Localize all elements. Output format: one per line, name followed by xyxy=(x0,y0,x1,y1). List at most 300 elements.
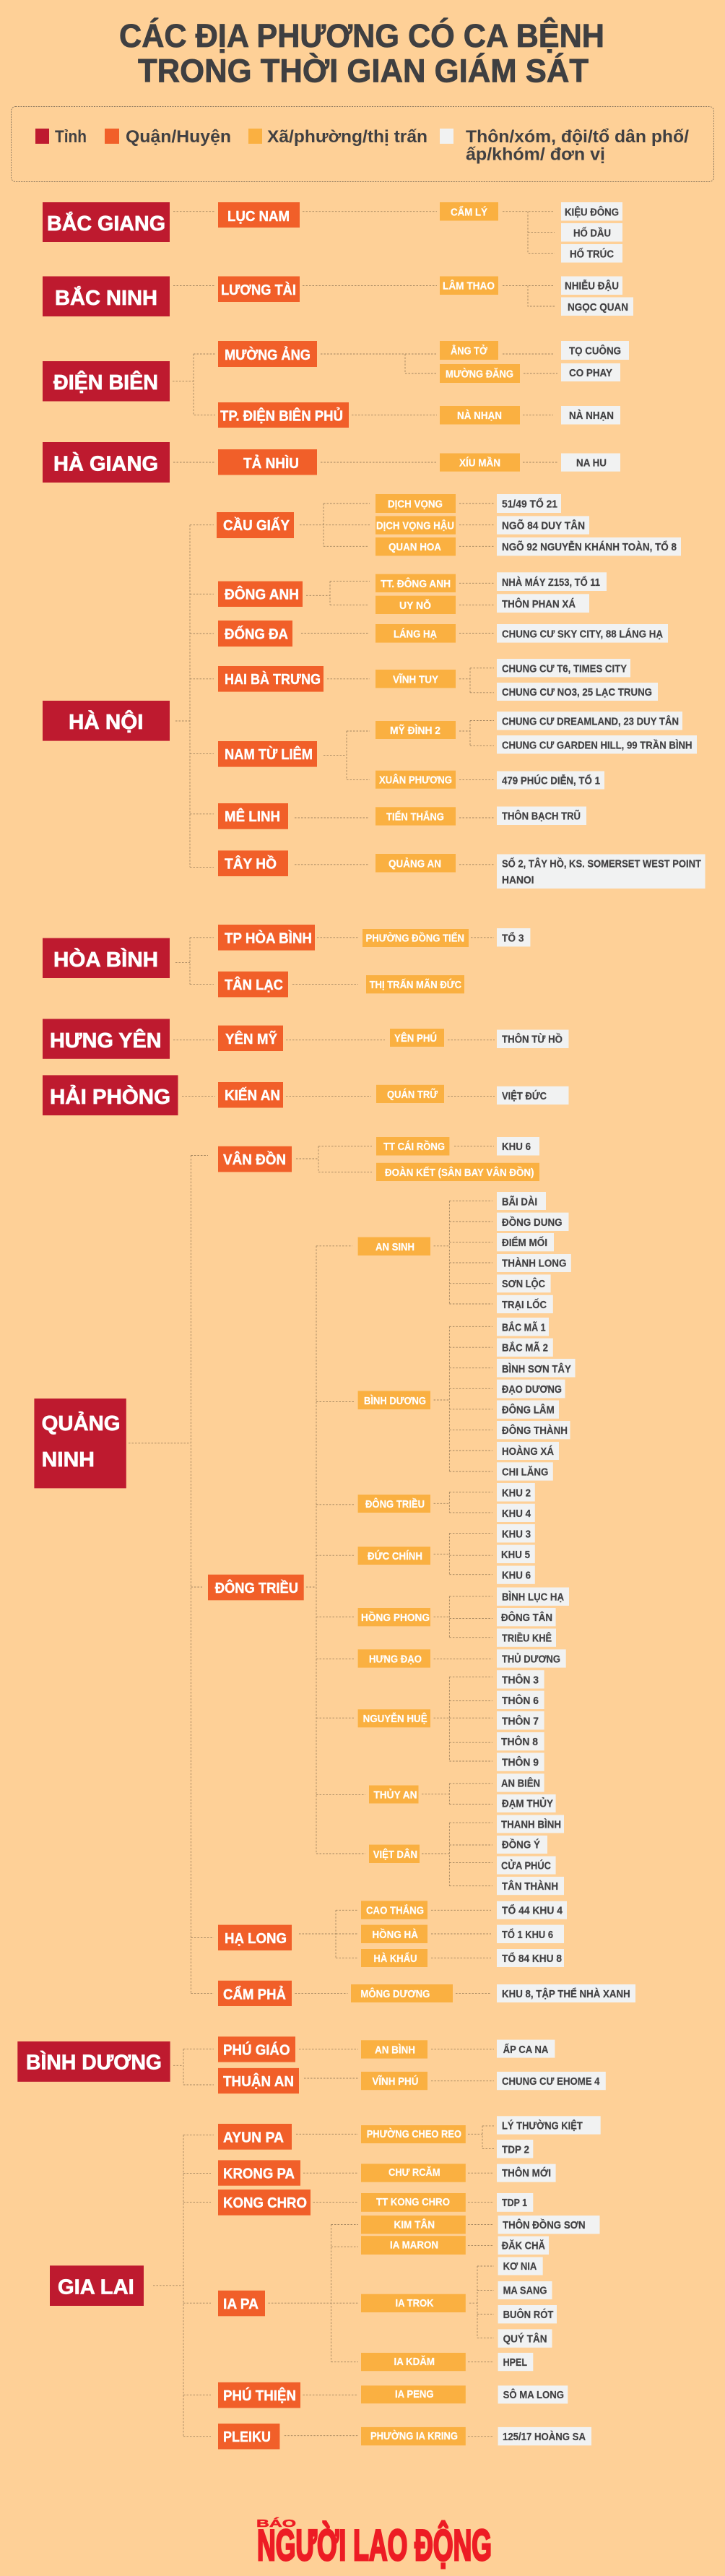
district: Krong Pa: KRONG PA xyxy=(223,2166,295,2182)
village: Đạo Dương: ĐẠO DƯƠNG xyxy=(502,1383,562,1396)
commune: Đức Chính xyxy=(358,1547,430,1565)
district: Pleiku: PLEIKU xyxy=(223,2429,271,2445)
village: Thôn 7 xyxy=(497,1711,544,1729)
district: Tân Lạc: TÂN LẠC xyxy=(225,976,283,993)
legend item: Tỉnh: Tỉnh xyxy=(55,127,87,147)
commune: Thủy An: THỦY AN xyxy=(373,1788,417,1801)
commune: TT Kong Chro xyxy=(361,2193,466,2212)
district: Hạ Long: HẠ LONG xyxy=(225,1931,287,1947)
district: Mường Ảng: MƯỜNG ẢNG xyxy=(225,346,311,363)
village: Tọ Cuông xyxy=(561,341,629,360)
commune: Xuân Phương: XUÂN PHƯƠNG xyxy=(379,773,452,786)
address: Nhà máy Z153 xyxy=(497,572,607,591)
commune: TT. Đông Anh xyxy=(375,574,456,592)
address: Tổ 1 Khu 6: TỔ 1 KHU 6 xyxy=(502,1928,553,1941)
village: TDP 2: TDP 2 xyxy=(502,2143,529,2156)
village: Na Hu xyxy=(561,454,620,472)
address: Thôn Phan Xá xyxy=(497,594,589,613)
commune: Ia Trok xyxy=(361,2294,466,2312)
commune: Kim Tân xyxy=(361,2216,466,2234)
village: Nà Nhạn: NÀ NHẠN xyxy=(569,410,614,422)
village: Ấp Ca Na: ẤP CA NA xyxy=(503,2044,549,2056)
province tree: Hưng Yên xyxy=(43,1019,569,1059)
commune: Vĩnh Tuy xyxy=(375,670,456,688)
logo: Báo Người Lao Động: BÁO xyxy=(256,2517,297,2530)
province tree: Hòa Bình xyxy=(43,925,530,997)
village: Hố Trúc: HỐ TRÚC xyxy=(570,247,614,260)
village: Thủ Dương: THỦ DƯƠNG xyxy=(502,1653,560,1666)
address: Somerset West Point xyxy=(497,854,705,889)
commune: Ẳng Tở: ẲNG TỞ xyxy=(451,344,487,357)
province: Hưng Yên xyxy=(43,1019,170,1059)
village: Thôn Đồng Sơn xyxy=(498,2216,599,2234)
commune: TT Cái Rồng: TT CÁI RỒNG xyxy=(383,1140,445,1153)
address: Ngõ 92 Nguyễn Khánh Toàn xyxy=(497,537,681,556)
district: Hai Bà Trưng xyxy=(218,666,324,692)
village: Đăk Chă: ĐĂK CHĂ xyxy=(502,2240,545,2252)
village: Ngọc Quan: NGỌC QUAN xyxy=(568,301,628,314)
district: Cẩm Phả: CẨM PHẢ xyxy=(223,1987,286,2002)
district: Nam Từ Liêm: NAM TỪ LIÊM xyxy=(225,745,313,763)
village: Ấp Ca Na xyxy=(497,2040,555,2058)
village: Thôn 9 xyxy=(497,1752,544,1771)
village: Sơn Lộc xyxy=(497,1274,551,1292)
commune: Đức Chính: ĐỨC CHÍNH xyxy=(368,1550,422,1563)
address: Ngõ 84 Duy Tân: NGÕ 84 DUY TÂN xyxy=(502,519,585,532)
address: Tổ 44 Khu 4 xyxy=(497,1901,567,1919)
village: Quý Tân: QUÝ TÂN xyxy=(503,2332,547,2345)
address: Thôn Phan Xá: THÔN PHAN XÁ xyxy=(502,597,576,610)
commune: Hà Khẩu xyxy=(361,1949,427,1967)
address: Somerset West Point: HANOI xyxy=(502,874,534,886)
village: Thôn 9: THÔN 9 xyxy=(502,1756,539,1769)
village: Khu 5: KHU 5 xyxy=(501,1549,530,1561)
village: Hpel xyxy=(498,2353,533,2371)
village: Bãi Dài xyxy=(497,1192,546,1210)
province: Bắc Giang: BẮC GIANG xyxy=(47,211,165,235)
address: Tổ 3 xyxy=(497,928,530,946)
commune: Phường Cheo Reo: PHƯỜNG CHEO REO xyxy=(367,2127,461,2140)
village: Chi Lăng xyxy=(497,1462,553,1481)
village: Sô Ma Long: SÔ MA LONG xyxy=(503,2388,564,2401)
district: Cầu Giấy: CẦU GIẤY xyxy=(223,517,290,534)
province tree: Bắc Ninh xyxy=(43,276,633,316)
district: TP. Điện Biên Phủ xyxy=(218,402,349,428)
commune: Uy Nỗ xyxy=(375,596,456,614)
commune: Bình Dương xyxy=(358,1391,430,1409)
village: Thôn Từ Hồ: THÔN TỪ HỒ xyxy=(502,1033,563,1046)
district: Thuận An xyxy=(218,2068,299,2093)
address: NO3 Lạc Trung xyxy=(497,683,658,701)
village: Khu 6 xyxy=(497,1566,535,1584)
address: Thôn Bạch Trữ: THÔN BẠCH TRŨ xyxy=(502,810,581,823)
village: Thanh Bình: THANH BÌNH xyxy=(501,1818,561,1831)
district: TP. Điện Biên Phủ: TP. ĐIỆN BIÊN PHỦ xyxy=(220,407,343,424)
village: Ma Sang xyxy=(498,2281,552,2299)
commune: Đông Triều xyxy=(358,1495,430,1513)
village: Lý Thường Kiệt: LÝ THƯỜNG KIỆT xyxy=(502,2119,583,2132)
village: Cửa Phúc xyxy=(497,1857,556,1875)
commune: Yên Phú xyxy=(390,1029,444,1047)
village: Sô Ma Long xyxy=(498,2385,568,2403)
commune: Cao Thắng xyxy=(361,1901,427,1919)
commune: Nà Nhạn xyxy=(440,406,520,425)
commune: Hồng Phong xyxy=(358,1608,430,1626)
village: Bãi Dài: BÃI DÀI xyxy=(502,1195,537,1208)
commune: Hồng Hà xyxy=(361,1925,427,1943)
commune: Đoàn Kết xyxy=(376,1163,539,1181)
commune: Cẩm Lý: CẨM LÝ xyxy=(451,205,487,218)
village: An Biên: AN BIÊN xyxy=(501,1777,540,1790)
district: Lương Tài: LƯƠNG TÀI xyxy=(221,282,296,298)
address: Sky City: CHUNG CƯ SKY CITY, 88 LÁNG HẠ xyxy=(502,628,663,640)
commune: Bình Dương: BÌNH DƯƠNG xyxy=(364,1395,426,1407)
commune: Ia Maron: IA MARON xyxy=(390,2239,438,2251)
village: Thôn 7: THÔN 7 xyxy=(502,1714,539,1727)
commune: Lâm Thao: LÂM THAO xyxy=(443,280,495,293)
commune: Mường Đăng xyxy=(440,364,520,383)
village: Đạm Thủy xyxy=(497,1794,556,1812)
province tree: Hà Nội xyxy=(43,494,705,889)
village: Thành Long xyxy=(497,1254,571,1272)
commune: Nguyễn Huệ xyxy=(358,1709,430,1727)
commune: Xuân Phương xyxy=(375,771,456,789)
province: Điện Biên: ĐIỆN BIÊN xyxy=(53,370,158,394)
address: 479 Phúc Diễn: 479 PHÚC DIỄN, TỔ 1 xyxy=(502,774,600,787)
commune: Hồng Phong: HỒNG PHONG xyxy=(361,1611,430,1624)
province: Hà Nội xyxy=(43,701,170,741)
village: Thôn Mới xyxy=(497,2164,556,2182)
district: Cẩm Phả xyxy=(218,1981,292,2006)
province: Hà Nội: HÀ NỘI xyxy=(69,709,143,734)
district: Kong Chro: KONG CHRO xyxy=(223,2195,307,2211)
district: Phú Thiện: PHÚ THIỆN xyxy=(223,2387,296,2404)
logo: Báo Người Lao Động xyxy=(256,2517,492,2569)
commune: Yên Phú: YÊN PHÚ xyxy=(394,1032,437,1045)
commune: Nguyễn Huệ: NGUYỄN HUỆ xyxy=(363,1712,427,1725)
district: Đông Anh xyxy=(218,582,303,607)
commune: Quan Hoa: QUAN HOA xyxy=(388,541,441,553)
village: Thôn 8: THÔN 8 xyxy=(501,1735,538,1748)
commune: Ia Peng: IA PENG xyxy=(395,2388,434,2400)
commune: Dịch Vọng Hậu: DỊCH VỌNG HẬU xyxy=(376,519,454,532)
district: Tây Hồ xyxy=(218,850,288,876)
commune: Ia Maron xyxy=(361,2236,466,2255)
address: Thôn Bạch Trữ xyxy=(497,806,586,825)
commune: Quan Hoa xyxy=(375,537,456,556)
commune: Ia Trok: IA TROK xyxy=(396,2297,434,2309)
address: 51/49 Tổ 21: 51/49 TỔ 21 xyxy=(502,497,557,510)
village: Kơ Nia xyxy=(498,2257,543,2275)
province: Quảng Ninh: QUẢNG xyxy=(42,1411,120,1435)
legend item: Xã/phường/thị trấn: Xã/phường/thị trấn xyxy=(267,127,427,147)
address: Tổ 84 Khu 8: TỔ 84 KHU 8 xyxy=(502,1952,562,1965)
district: Yên Mỹ: YÊN MỸ xyxy=(225,1030,278,1047)
village: Thôn Đồng Sơn: THÔN ĐỒNG SƠN xyxy=(503,2218,586,2231)
village: Kơ Nia: KƠ NIA xyxy=(503,2260,537,2273)
province: Hưng Yên: HƯNG YÊN xyxy=(50,1028,162,1053)
province: Hòa Bình: HÒA BÌNH xyxy=(53,947,158,972)
province: Hòa Bình xyxy=(43,938,170,978)
address: Times City xyxy=(497,659,630,677)
commune: An Bình: AN BÌNH xyxy=(375,2044,415,2056)
village: Nà Nhạn xyxy=(561,406,620,425)
commune: Chư Rcăm: CHƯ RCĂM xyxy=(388,2166,440,2179)
commune: Phường Đồng Tiến: PHƯỜNG ĐỒNG TIẾN xyxy=(365,932,464,945)
commune: Phường Cheo Reo xyxy=(361,2125,466,2143)
address: 125/17 Hoàng Sa: 125/17 HOÀNG SA xyxy=(503,2431,586,2443)
village: An Biên xyxy=(497,1773,544,1792)
province: Bình Dương: BÌNH DƯƠNG xyxy=(26,2049,162,2074)
commune: Quảng An xyxy=(375,854,456,873)
address: Dreamland xyxy=(497,712,682,730)
commune: Tiến Thắng xyxy=(375,807,456,826)
legend item: Thôn/xóm: Thôn/xóm, đội/tổ dân phố/ xyxy=(466,127,689,147)
village: Thanh Bình xyxy=(497,1815,564,1833)
province: Bắc Giang xyxy=(43,202,170,242)
title xyxy=(119,17,604,90)
commune: Quảng An: QUẢNG AN xyxy=(388,857,441,870)
district: Phú Thiện xyxy=(218,2382,300,2408)
province tree: Gia Lai xyxy=(50,2116,601,2449)
province: Gia Lai: GIA LAI xyxy=(58,2276,134,2299)
village: Hố Dầu xyxy=(561,223,622,241)
village: TDP 1: TDP 1 xyxy=(502,2197,527,2209)
district: Tân Lạc xyxy=(218,972,288,997)
commune: Mường Đăng: MƯỜNG ĐĂNG xyxy=(446,368,513,381)
commune: Thị trấn Mãn Đức xyxy=(366,975,464,993)
village: Thôn Mới: THÔN MỚI xyxy=(502,2166,551,2179)
village: Việt Đức: VIỆT ĐỨC xyxy=(502,1089,547,1102)
village: Lý Thường Kiệt xyxy=(497,2116,601,2135)
district: TP Hòa Bình xyxy=(218,925,315,951)
commune: Quán Trữ: QUÁN TRỮ xyxy=(387,1088,438,1101)
address: Tổ 1 Khu 6 xyxy=(497,1925,564,1943)
village: Co Phay xyxy=(561,363,620,381)
village: Đông Lâm xyxy=(497,1400,559,1419)
district: Mê Linh: MÊ LINH xyxy=(225,808,280,825)
district: Krong Pa xyxy=(218,2160,300,2186)
commune: Nà Nhạn: NÀ NHẠN xyxy=(457,410,502,422)
address: NO3 Lạc Trung: CHUNG CƯ NO3, 25 LẠC TRUNG xyxy=(502,686,652,699)
village: Hố Dầu: HỐ DẦU xyxy=(573,226,611,239)
commune: Mỹ Đình 2 xyxy=(375,721,456,739)
address: Chung cư Ehome 4 xyxy=(497,2072,606,2090)
province: Bắc Ninh xyxy=(43,276,170,316)
district: Ia Pa xyxy=(218,2291,265,2316)
district: Đông Triều: ĐÔNG TRIỀU xyxy=(215,1579,298,1596)
commune: Cao Thắng: CAO THẮNG xyxy=(366,1903,424,1916)
district: Lục Nam: LỤC NAM xyxy=(227,209,290,225)
village: Trại Lốc: TRẠI LỐC xyxy=(502,1298,547,1311)
commune: An Bình xyxy=(361,2040,427,2059)
commune: Lâm Thao xyxy=(440,276,498,295)
district: Mê Linh xyxy=(218,803,288,829)
legend item: Thôn/xóm: ấp/khóm/ đơn vị xyxy=(466,144,605,165)
village: Khu 6 xyxy=(497,1137,539,1156)
village: Ma Sang: MA SANG xyxy=(503,2285,547,2297)
village: Đông Lâm: ĐÔNG LÂM xyxy=(502,1404,555,1417)
address: Tổ 44 Khu 4: TỔ 44 KHU 4 xyxy=(502,1904,563,1917)
commune: Thị trấn Mãn Đức: THỊ TRẤN MÃN ĐỨC xyxy=(370,978,461,991)
village: Đăk Chă xyxy=(498,2236,549,2255)
district: Lương Tài xyxy=(218,276,300,302)
village: Thủ Dương xyxy=(497,1649,566,1668)
village: Thôn 8 xyxy=(497,1732,544,1750)
village: Thôn 6 xyxy=(497,1691,544,1709)
district: Kong Chro xyxy=(218,2190,311,2216)
village: TDP 1 xyxy=(497,2193,533,2212)
commune: Xíu Mần xyxy=(440,454,520,472)
district: Ia Pa: IA PA xyxy=(223,2296,259,2312)
commune: Dịch Vọng Hậu xyxy=(375,516,456,535)
commune: Vĩnh Phú xyxy=(361,2072,427,2090)
district: Yên Mỹ xyxy=(218,1026,283,1051)
legend item: Quận/Huyện: Quận/Huyện xyxy=(126,127,231,147)
commune: Ia Peng xyxy=(361,2385,466,2403)
address: Tổ 84 Khu 8 xyxy=(497,1949,564,1967)
commune: Mông Dương: MÔNG DƯƠNG xyxy=(360,1987,430,2000)
district: Kiến An: KIẾN AN xyxy=(225,1087,280,1104)
province: Quảng Ninh xyxy=(34,1399,126,1488)
district: Đống Đa xyxy=(218,621,292,647)
village: Đồng Ý: ĐỒNG Ý xyxy=(502,1838,540,1851)
address: Garden Hill xyxy=(497,735,697,753)
village: Thôn Từ Hồ xyxy=(497,1030,569,1048)
village: Trại Lốc xyxy=(497,1295,553,1313)
commune: Cẩm Lý xyxy=(440,202,498,221)
village: Đồng Ý xyxy=(497,1836,547,1854)
village: Khu 6: KHU 6 xyxy=(502,1141,531,1153)
village: Đông Thành: ĐÔNG THÀNH xyxy=(502,1424,568,1437)
commune: Hồng Hà: HỒNG HÀ xyxy=(372,1928,418,1941)
commune: Chư Rcăm xyxy=(361,2164,466,2182)
village: Cửa Phúc: CỬA PHÚC xyxy=(501,1859,551,1872)
logo: Báo Người Lao Động: NGƯỜI LAO ĐỘNG xyxy=(257,2521,492,2569)
address: 51/49 Tổ 21 xyxy=(497,494,561,513)
village: Kiệu Đông: KIỆU ĐÔNG xyxy=(565,205,619,218)
village: Điểm Mối: ĐIỂM MỐI xyxy=(502,1236,547,1249)
address: 125/17 Hoàng Sa xyxy=(498,2427,591,2445)
village: Hoàng Xá xyxy=(497,1442,559,1460)
village: Buôn Rót xyxy=(498,2305,557,2323)
district: Phú Giáo xyxy=(218,2036,295,2062)
province: Quảng Ninh: NINH xyxy=(42,1448,95,1471)
province: Gia Lai xyxy=(50,2265,144,2306)
village: Thôn 6: THÔN 6 xyxy=(502,1694,539,1707)
commune: Hưng Đạo: HƯNG ĐẠO xyxy=(369,1653,422,1666)
district: Đông Triều xyxy=(208,1575,304,1600)
district: Đống Đa: ĐỐNG ĐA xyxy=(225,625,288,642)
village: Nhiễu Đậu: NHIỄU ĐẬU xyxy=(565,280,619,293)
village: Bắc Mã 1 xyxy=(497,1318,549,1336)
village: Bình Sơn Tây xyxy=(497,1359,575,1377)
commune: Láng Hạ xyxy=(375,624,456,643)
commune: Uy Nỗ: UY NỖ xyxy=(399,599,431,612)
commune: Phường Ia Kring xyxy=(361,2427,466,2445)
district: Hai Bà Trưng: HAI BÀ TRƯNG xyxy=(225,671,321,688)
address: Dreamland: CHUNG CƯ DREAMLAND, 23 DUY TÂN xyxy=(502,715,679,728)
village: Thôn 3 xyxy=(497,1670,544,1689)
village: Triều Khê xyxy=(497,1628,556,1647)
address: Ngõ 84 Duy Tân xyxy=(497,516,589,535)
address: Khu 8 tập thể nhà xanh: KHU 8, TẬP THỂ NHÀ XANH xyxy=(502,1987,630,2000)
commune: Dịch Vọng: DỊCH VỌNG xyxy=(388,498,443,510)
district: TP Hòa Bình: TP HÒA BÌNH xyxy=(225,930,312,947)
district: Đông Anh: ĐÔNG ANH xyxy=(225,585,299,602)
district: Tây Hồ: TÂY HỒ xyxy=(225,855,277,872)
commune: Hà Khẩu: HÀ KHẨU xyxy=(373,1952,417,1965)
province: Hải Phòng xyxy=(43,1075,178,1115)
title: TRONG THỜI GIAN GIÁM SÁT xyxy=(138,52,589,90)
village: Điểm Mối xyxy=(497,1233,554,1251)
district: Ayun Pa xyxy=(218,2124,292,2150)
village: Đồng Dung xyxy=(497,1213,569,1231)
province tree: Bình Dương xyxy=(17,2036,606,2093)
province tree: Bắc Giang xyxy=(43,202,622,263)
commune: Việt Dân xyxy=(369,1845,420,1863)
district: Phú Giáo: PHÚ GIÁO xyxy=(223,2041,290,2058)
address: Sky City xyxy=(497,624,668,643)
legend item: Tỉnh xyxy=(35,127,87,147)
province: Bình Dương xyxy=(17,2041,170,2082)
commune: Vĩnh Phú: VĨNH PHÚ xyxy=(372,2075,418,2088)
village: Hpel: HPEL xyxy=(503,2356,527,2369)
commune: Vĩnh Tuy: VĨNH TUY xyxy=(393,673,438,686)
village: Việt Đức xyxy=(497,1086,569,1105)
commune: Kim Tân: KIM TÂN xyxy=(394,2218,435,2231)
village: Đông Tân: ĐÔNG TÂN xyxy=(501,1611,552,1624)
village: Hoàng Xá: HOÀNG XÁ xyxy=(502,1445,554,1458)
village: Đạo Dương xyxy=(497,1380,565,1398)
commune: An Sinh xyxy=(358,1237,430,1255)
province: Hà Giang: HÀ GIANG xyxy=(53,451,158,475)
village: Na Hu: NA HU xyxy=(576,457,607,470)
commune: Hưng Đạo xyxy=(358,1649,430,1668)
village: Bắc Mã 1: BẮC MÃ 1 xyxy=(502,1321,546,1334)
address: 479 Phúc Diễn xyxy=(497,771,604,789)
commune: Tiến Thắng: TIẾN THẮNG xyxy=(386,811,444,824)
district: Ayun Pa: AYUN PA xyxy=(223,2130,284,2145)
village: Đồng Dung: ĐỒNG DUNG xyxy=(502,1216,563,1229)
address: Somerset West Point: SỐ 2, TÂY HỒ, KS. SOMERSET WEST POINT xyxy=(502,857,701,870)
village: Bắc Mã 2 xyxy=(497,1339,553,1357)
commune: Ẳng Tở xyxy=(440,341,498,360)
village: Chi Lăng: CHI LĂNG xyxy=(502,1466,548,1478)
district: Vân Đồn: VÂN ĐỒN xyxy=(223,1151,286,1168)
commune: Việt Dân: VIỆT DÂN xyxy=(373,1848,417,1861)
village: Khu 4: KHU 4 xyxy=(502,1508,531,1520)
district: Nam Từ Liêm xyxy=(218,741,317,767)
village: Bình Lục Hạ xyxy=(497,1588,569,1606)
province: Hà Giang xyxy=(43,442,170,483)
village: Triều Khê: TRIỀU KHÊ xyxy=(502,1632,552,1645)
address: Times City: CHUNG CƯ T6, TIMES CITY xyxy=(502,662,627,675)
province: Hải Phòng: HẢI PHÒNG xyxy=(50,1084,170,1109)
village: Bình Lục Hạ: BÌNH LỤC HẠ xyxy=(502,1591,564,1604)
commune: Mông Dương xyxy=(351,1984,453,2002)
commune: Láng Hạ: LÁNG HẠ xyxy=(394,628,437,640)
commune: Thủy An xyxy=(369,1786,419,1803)
commune: Đông Triều: ĐÔNG TRIỀU xyxy=(365,1497,425,1510)
legend item: Thôn/xóm xyxy=(440,127,689,165)
commune: Đoàn Kết: ĐOÀN KẾT (SÂN BAY VÂN ĐỒN) xyxy=(385,1166,534,1179)
commune: Phường Ia Kring: PHƯỜNG IA KRING xyxy=(370,2429,458,2442)
address: Nhà máy Z153: NHÀ MÁY Z153, TỔ 11 xyxy=(502,576,600,589)
district: Cầu Giấy xyxy=(217,512,294,538)
title: CÁC ĐỊA PHƯƠNG CÓ CA BỆNH xyxy=(119,17,604,54)
village: Kiệu Đông xyxy=(561,202,622,221)
